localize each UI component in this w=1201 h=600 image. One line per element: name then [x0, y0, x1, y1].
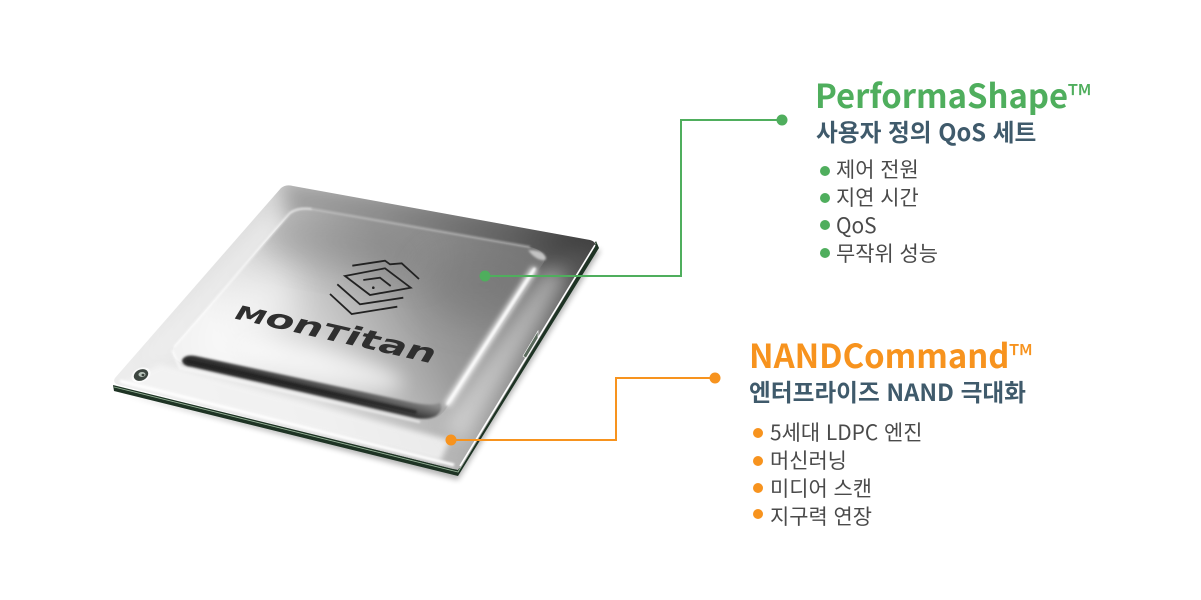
heading: NANDCommand: NANDCommand™	[749, 331, 1032, 378]
circuit board edge	[113, 241, 599, 476]
side notch	[523, 331, 538, 358]
feature list: 5세대 LDPC 엔진	[770, 417, 922, 447]
subheading: 사용자 정의 QoS 세트	[816, 114, 1036, 148]
connector: orange	[446, 372, 720, 446]
heading: PerformaShape: PerformaShape™	[815, 71, 1091, 118]
metal lid	[114, 180, 600, 469]
panel highlights	[174, 208, 312, 347]
block: NANDCommand	[749, 331, 1032, 531]
feature list	[820, 154, 938, 268]
processor chip	[113, 180, 601, 480]
block: PerformaShape	[815, 71, 1091, 268]
feature list	[753, 417, 922, 531]
screw	[129, 364, 153, 386]
feature list: 머신러닝	[770, 445, 847, 475]
chip shadow	[116, 250, 601, 480]
feature list: 무작위 성능	[836, 238, 938, 268]
logo icon	[330, 261, 419, 314]
feature list: 지구력 연장	[770, 501, 872, 531]
feature list: 제어 전원	[836, 154, 919, 184]
subheading: 엔터프라이즈 NAND 극대화	[749, 374, 1026, 408]
logo wordmark: Mon Titan	[228, 295, 445, 369]
bottom groove shadow	[182, 356, 441, 419]
raised centre panel	[172, 204, 546, 422]
feature list: 미디어 스캔	[770, 473, 872, 503]
feature list: 지연 시간	[836, 182, 919, 212]
connector: green	[480, 114, 788, 282]
feature list: QoS	[836, 210, 877, 240]
